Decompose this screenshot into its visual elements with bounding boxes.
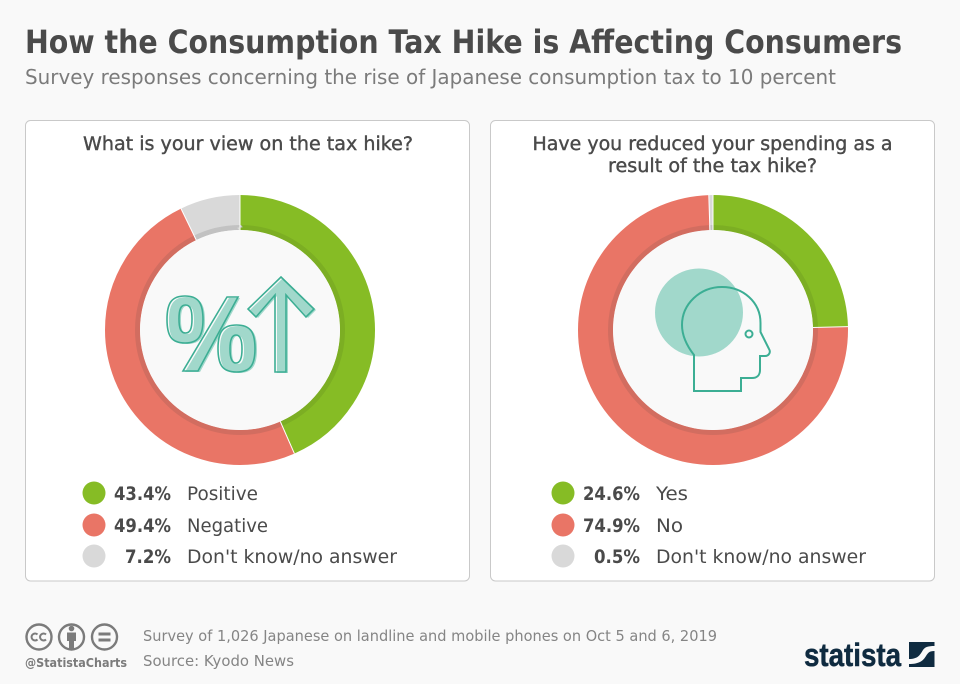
panel heading: reduced spending xyxy=(532,134,892,177)
legend row: positive: Positive xyxy=(187,483,258,505)
legend row: negative: 49.4% xyxy=(114,515,171,537)
legend row: yes xyxy=(552,482,688,505)
handle: @StatistaCharts xyxy=(25,656,127,670)
legend row: no xyxy=(552,514,683,537)
legend row: negative xyxy=(82,514,268,537)
legend row: negative: Negative xyxy=(187,515,268,537)
legend row: don't know: 0.5% xyxy=(594,546,640,568)
legend row: don't know xyxy=(552,544,866,568)
panel heading: reduced spending: Have you reduced your spending as a xyxy=(532,134,892,155)
donut chart: view on tax hike xyxy=(122,195,358,454)
legend row: yes: Yes xyxy=(655,483,688,505)
donut chart: reduced spending xyxy=(596,195,848,448)
panel heading: view on tax hike: What is your view on the tax hike? xyxy=(83,134,413,155)
legend row: don't know xyxy=(82,544,397,568)
panel: reduced spending xyxy=(490,120,934,581)
legend row: don't know: Don't know/no answer xyxy=(656,546,866,568)
legend row: no: No xyxy=(656,515,683,537)
panel heading: reduced spending: result of the tax hike? xyxy=(608,156,817,177)
legend row: yes: 24.6% xyxy=(583,483,640,505)
icon: creative commons licence xyxy=(26,624,117,650)
legend row: don't know: Don't know/no answer xyxy=(187,546,397,568)
source note: Source: Kyodo News xyxy=(143,652,294,670)
panel: view on the tax hike xyxy=(26,120,470,581)
icon: head with circle xyxy=(655,268,770,391)
source note xyxy=(143,627,717,670)
subtitle: Survey responses concerning the rise of Japanese consumption tax to 10 percent xyxy=(25,65,836,89)
icon: percent and up arrow xyxy=(167,277,316,373)
legend row: no: 74.9% xyxy=(583,515,640,537)
legend row: positive xyxy=(82,482,258,505)
legend row: positive: 43.4% xyxy=(114,483,171,505)
legend row: don't know: 7.2% xyxy=(125,546,171,568)
source note: Survey of 1,026 Japanese on landline and mobile phones on Oct 5 and 6, 2019 xyxy=(143,627,717,645)
statista logo: statista xyxy=(804,637,901,673)
